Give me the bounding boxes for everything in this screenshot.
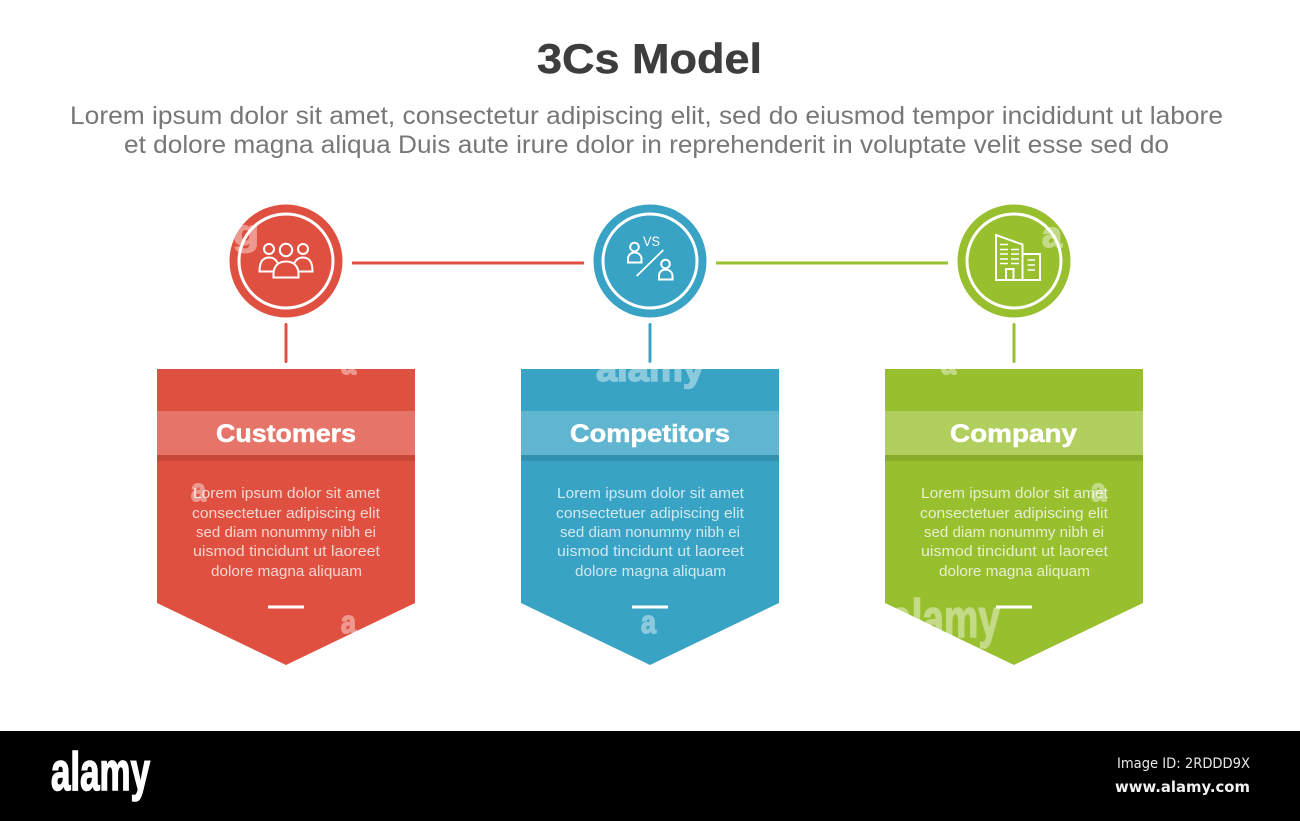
header band: company — [885, 411, 1143, 455]
body text: competitors: Lorem ipsum dolor sit amet — [557, 485, 745, 502]
icon label: vs: VS — [643, 233, 660, 249]
dash: customers — [268, 606, 304, 608]
icon: office buildings — [996, 235, 1040, 280]
watermark: alamy fragments — [191, 212, 1106, 649]
body text: company: consectetuer adipiscing elit — [920, 505, 1109, 522]
heading: competitors: Competitors — [570, 420, 730, 448]
watermark: alamy fragments: a — [341, 604, 356, 640]
body text: customers: sed diam nonummy nibh ei — [196, 524, 376, 541]
dash: competitors — [632, 606, 668, 608]
watermark: alamy fragments: a — [1091, 472, 1106, 508]
intro text block — [70, 102, 1223, 159]
watermark: alamy fragments: a — [1042, 214, 1063, 255]
footer url: www.alamy.com — [1115, 778, 1250, 796]
heading: customers: Customers — [216, 420, 356, 448]
footer image id: Image ID: 2RDDD9X — [1117, 756, 1250, 772]
body text: customers: consectetuer adipiscing elit — [192, 505, 381, 522]
heading: company: Company — [950, 420, 1077, 448]
body text: company: sed diam nonummy nibh ei — [924, 524, 1104, 541]
body text: competitors: consectetuer adipiscing elit — [556, 505, 745, 522]
footer logo: alamy — [51, 742, 150, 802]
watermark: alamy fragments: a — [941, 345, 956, 381]
dash: company — [996, 606, 1032, 608]
watermark: alamy fragments: alamy — [596, 348, 704, 389]
watermark: alamy fragments: a — [641, 604, 656, 640]
connector: blue vertical line — [648, 323, 652, 363]
body text: customers: Lorem ipsum dolor sit amet — [193, 485, 381, 502]
body text: customers: dolore magna aliquam — [211, 563, 362, 580]
panel shape: competitors — [521, 369, 779, 665]
body text: company: uismod tincidunt ut laoreet — [921, 543, 1109, 560]
title: 3Cs Model — [537, 35, 762, 82]
watermark: alamy fragments: a — [341, 345, 356, 381]
column: customers — [157, 204, 415, 665]
icon: group of people — [260, 244, 312, 278]
column: competitors — [521, 204, 779, 665]
icon: versus people — [628, 243, 672, 280]
header band: competitors — [521, 411, 779, 455]
header shadow: competitors — [521, 455, 779, 461]
header shadow: company — [885, 455, 1143, 461]
body text: competitors: uismod tincidunt ut laoreet — [557, 543, 745, 560]
panel shape: customers — [157, 369, 415, 665]
body text: competitors: sed diam nonummy nibh ei — [560, 524, 740, 541]
connector: green vertical line — [1012, 323, 1016, 363]
footer bar — [0, 731, 1300, 821]
icon circle: competitors — [594, 204, 706, 318]
intro text block: Lorem ipsum dolor sit amet, consectetur adipiscing elit, sed do eiusmod tempor incididunt ut labore — [70, 102, 1223, 130]
body text: customers: uismod tincidunt ut laoreet — [193, 543, 381, 560]
connector: red vertical line — [284, 323, 288, 363]
intro text block: et dolore magna aliqua Duis aute irure dolor in reprehenderit in voluptate velit esse sed do — [124, 131, 1169, 159]
body text: company — [920, 485, 1109, 580]
watermark: alamy fragments: alamy — [890, 589, 1000, 649]
body text: competitors: dolore magna aliquam — [575, 563, 726, 580]
column: company — [885, 204, 1143, 665]
watermark: alamy fragments: g — [233, 212, 259, 253]
header band: customers — [157, 411, 415, 455]
body text: competitors — [556, 485, 745, 580]
icon circle: customers — [230, 204, 342, 318]
connector: red horizontal line — [352, 262, 584, 264]
connector: green horizontal line — [716, 262, 948, 264]
header shadow: customers — [157, 455, 415, 461]
body text: customers — [192, 485, 381, 580]
icon circle: company — [958, 204, 1070, 318]
panel shape: company — [885, 369, 1143, 665]
body text: company: dolore magna aliquam — [939, 563, 1090, 580]
watermark: alamy fragments: a — [191, 472, 206, 508]
body text: company: Lorem ipsum dolor sit amet — [921, 485, 1109, 502]
